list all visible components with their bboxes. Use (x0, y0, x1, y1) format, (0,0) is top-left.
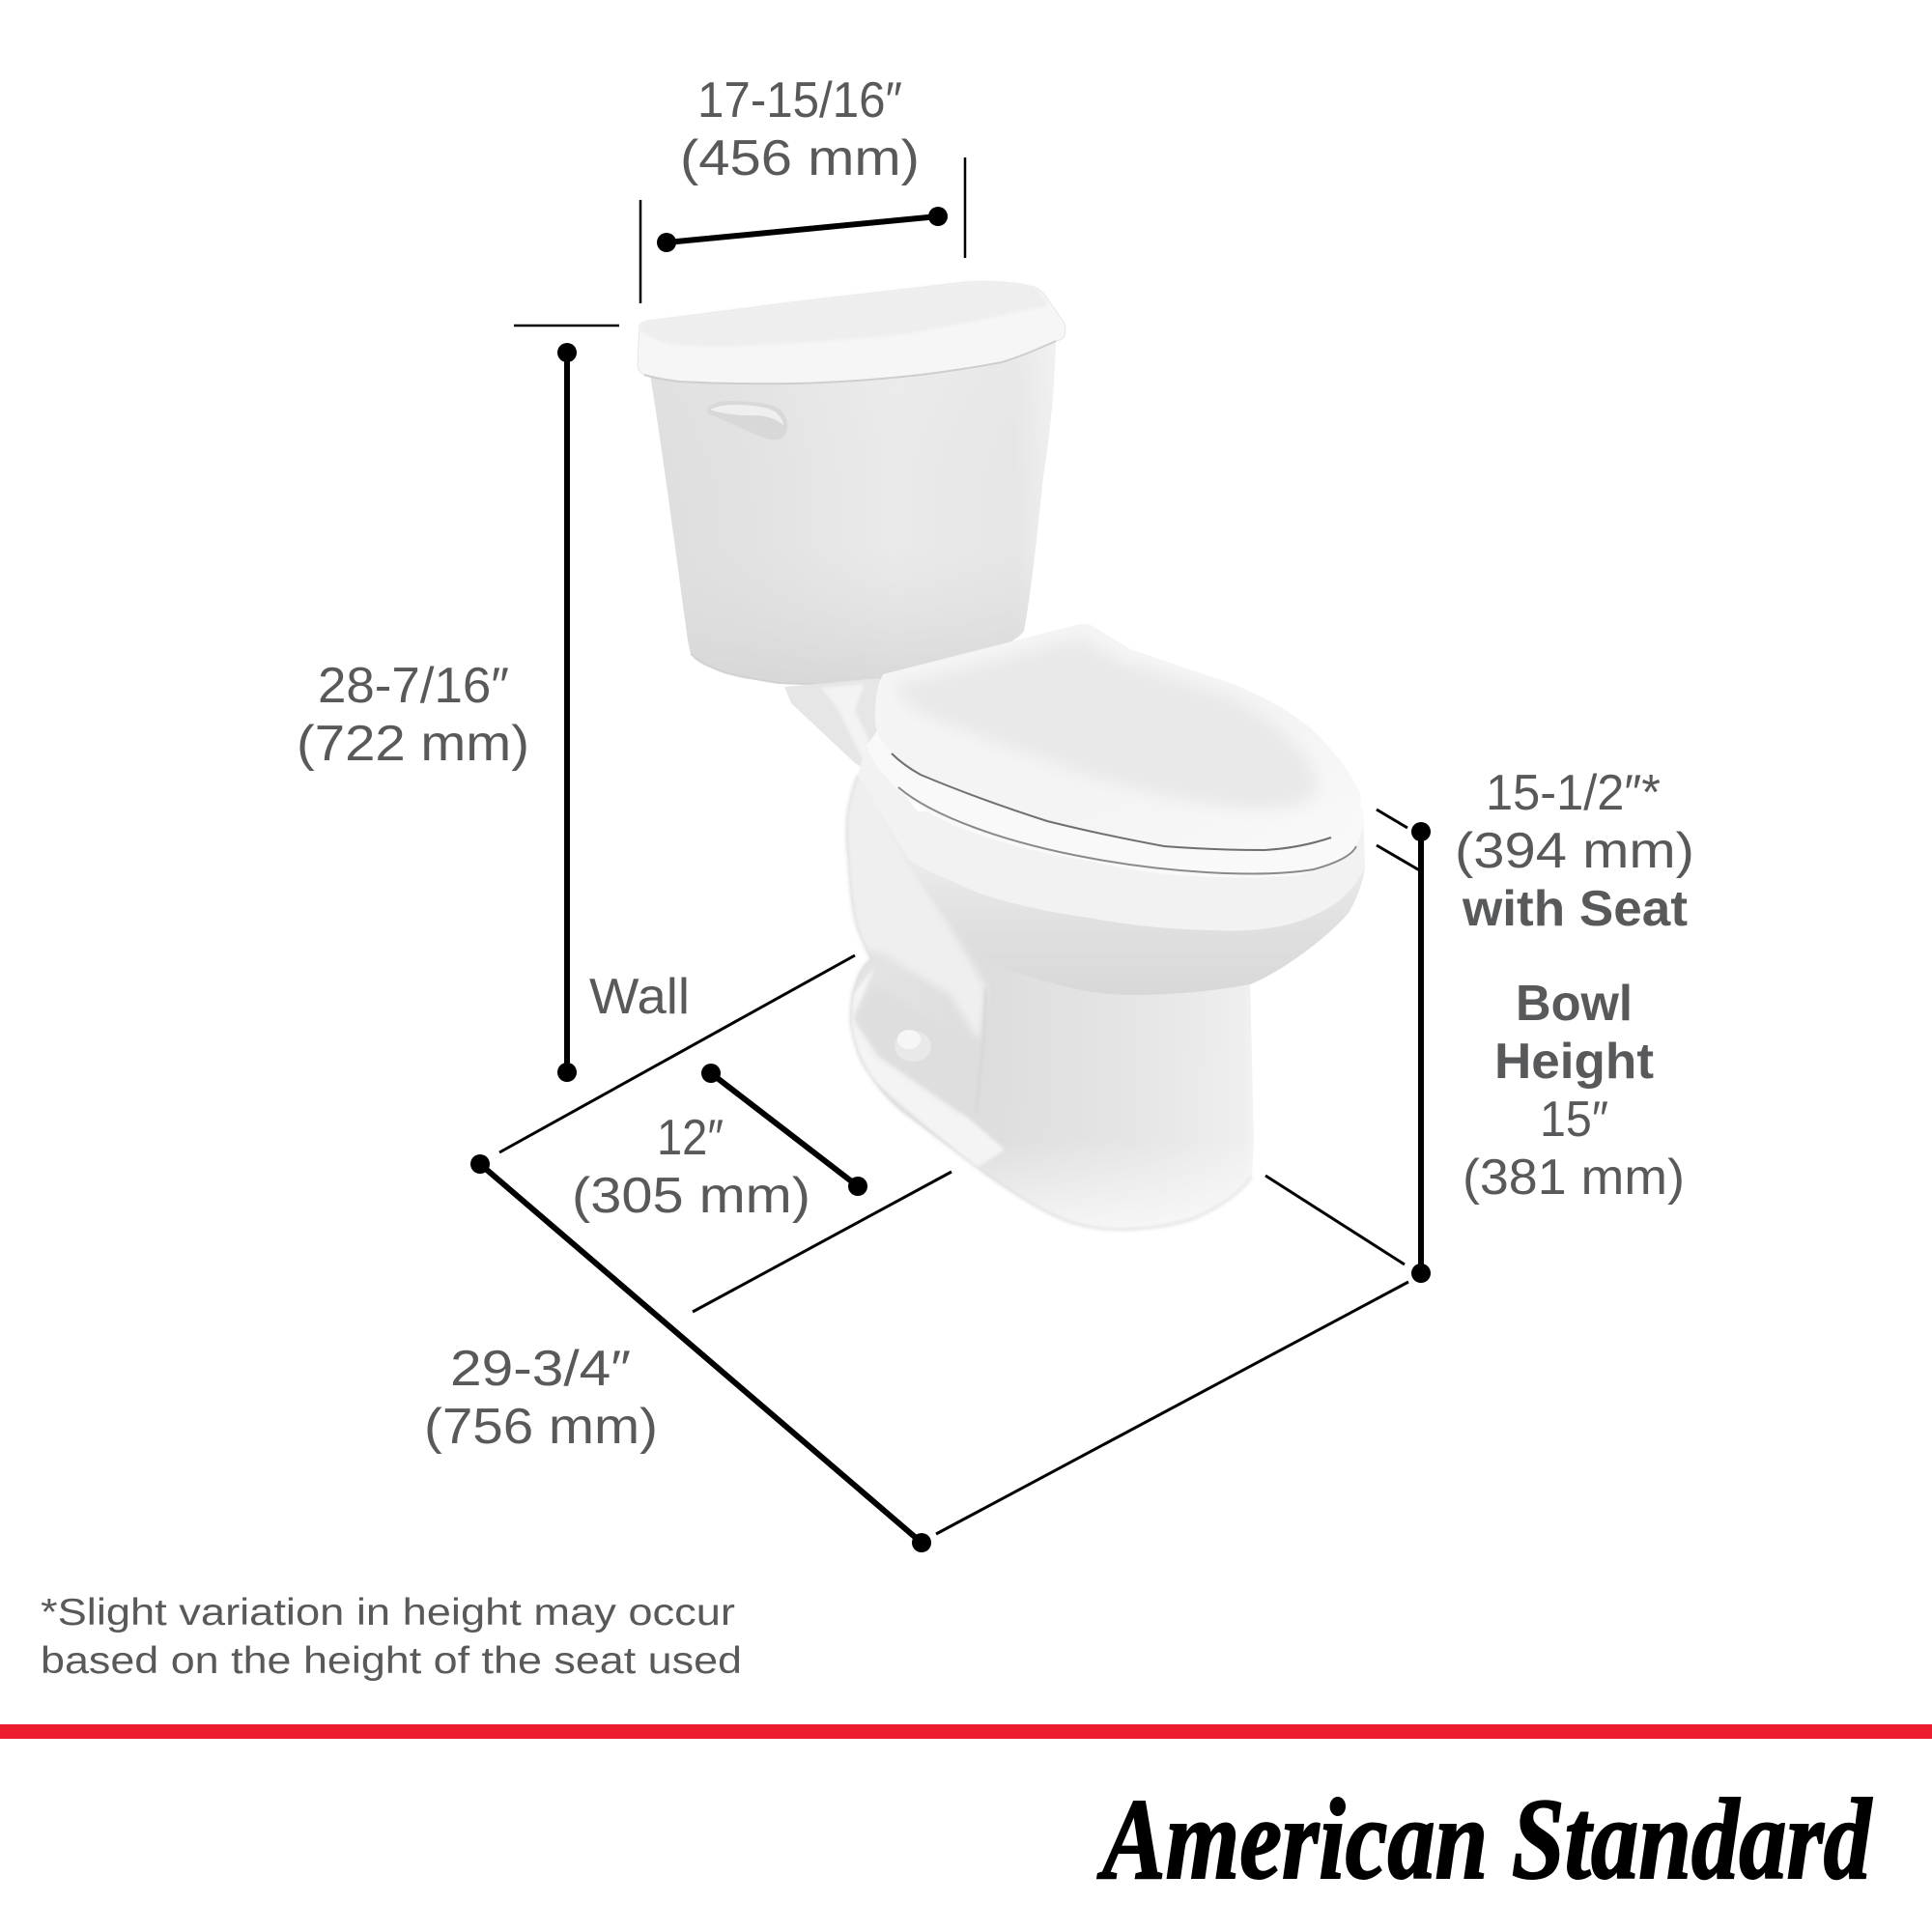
footnote: *Slight variation in height may occur (41, 1592, 735, 1634)
red divider bar (0, 1724, 1932, 1739)
toilet illustration (638, 282, 1365, 1246)
dimension: tank width 17-15/16 (640, 72, 965, 303)
dimension: bowl height: 15″ (1540, 1092, 1608, 1148)
trapway neck (784, 678, 894, 773)
dimension: overall depth 29-3/4 (424, 1154, 1408, 1552)
dimension: overall depth 29-3/4: 29-3/4″ (450, 1341, 631, 1397)
dimension: bowl height: 15-1/2″* (1486, 765, 1661, 821)
dimension: bowl height: with Seat (1462, 881, 1688, 937)
bowl rim (858, 746, 1365, 931)
dimension: overall height 28-7/16 (297, 326, 619, 1082)
floor bolt cap (895, 1030, 931, 1062)
bowl pedestal and base (846, 775, 1254, 1227)
dimension: overall height 28-7/16: 28-7/16″ (318, 658, 509, 714)
bowl underside (903, 821, 1365, 995)
dimension: bowl height: (394 mm) (1455, 823, 1694, 879)
footnote (41, 1592, 742, 1682)
pedestal silhouette edge (846, 775, 1252, 1230)
dimension: tank width 17-15/16: (456 mm) (680, 130, 920, 186)
dimension: rough-in 12 (572, 1064, 952, 1312)
toilet seat lid (875, 624, 1361, 850)
recess (854, 984, 983, 1114)
label: wall: Wall (589, 969, 690, 1025)
seat ring (867, 715, 1363, 878)
tank lid (638, 282, 1065, 384)
dimension: overall height 28-7/16: (722 mm) (297, 716, 529, 772)
dimension: tank width 17-15/16: 17-15/16″ (697, 72, 902, 128)
dimension: bowl height: (381 mm) (1463, 1150, 1685, 1206)
dimension: rough-in 12: (305 mm) (572, 1168, 810, 1224)
footnote: based on the height of the seat used (41, 1640, 742, 1682)
dimension: bowl height: Height (1494, 1034, 1654, 1090)
toilet tank body (650, 340, 1056, 684)
dimension: bowl height (1377, 765, 1694, 1283)
dimension: rough-in 12: 12″ (657, 1110, 724, 1166)
flush handle (707, 401, 787, 440)
bowl back tube (848, 777, 985, 1036)
wall reference line (499, 955, 855, 1152)
base flange (848, 966, 1005, 1169)
dimension: overall depth 29-3/4: (756 mm) (424, 1399, 658, 1455)
dimension: bowl height: Bowl (1516, 976, 1633, 1032)
